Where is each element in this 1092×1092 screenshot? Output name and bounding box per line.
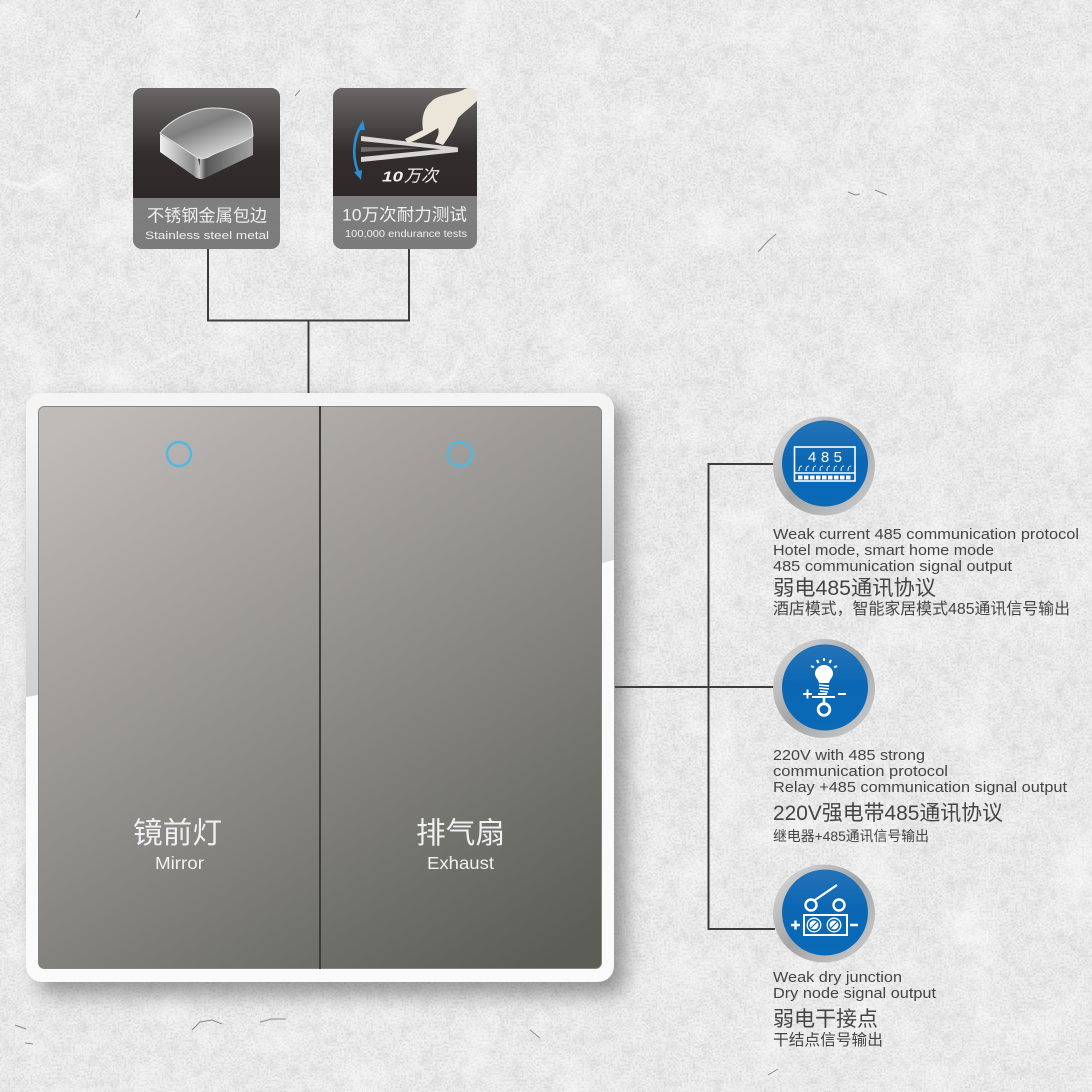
indicator: right button LED xyxy=(448,442,472,466)
label: mirror button: Mirror xyxy=(155,853,204,873)
text block: 485 protocol xyxy=(773,526,1079,618)
icon: finger pressing strips: 10 xyxy=(382,168,404,186)
text block: 220V strong current: 220V with 485 strong xyxy=(773,747,925,764)
text block: 220V strong current: 继电器+485通讯信号输出 xyxy=(773,828,929,844)
text block: 485 protocol: 485 communication signal output xyxy=(773,558,1013,575)
text block: 485 protocol: 弱电485通讯协议 xyxy=(773,577,936,600)
label: mirror button: 镜前灯 xyxy=(133,817,222,850)
icon: 220V strong current xyxy=(773,639,875,738)
icon: 485 protocol xyxy=(773,416,875,516)
text block: dry junction: Weak dry junction xyxy=(773,969,902,986)
text block: dry junction: 弱电干接点 xyxy=(773,1008,878,1031)
text block: dry junction: Dry node signal output xyxy=(773,985,937,1002)
label: exhaust button xyxy=(416,817,505,873)
text: stainless steel labels: Stainless steel metal xyxy=(145,230,269,242)
label: exhaust button: Exhaust xyxy=(427,853,494,873)
switch: glass panel xyxy=(38,406,602,969)
connector lines: top features xyxy=(208,248,409,394)
text block: 220V strong current xyxy=(773,747,1068,844)
icon: dry junction xyxy=(773,864,875,962)
icon: curved blue arrow xyxy=(354,120,365,180)
icon: finger pressing strips xyxy=(354,88,477,186)
text block: 220V strong current: Relay +485 communication signal output xyxy=(773,779,1068,796)
connector lines: right features xyxy=(615,464,775,929)
switch: outer frame xyxy=(26,393,614,982)
icon: finger pressing strips: 万次 xyxy=(404,166,440,186)
text block: 485 protocol: Hotel mode, smart home mode xyxy=(773,542,994,559)
text: stainless steel labels: 不锈钢金属包边 xyxy=(147,206,267,226)
text: endurance labels: 100,000 endurance tests xyxy=(345,229,467,240)
text block: dry junction: 干结点信号输出 xyxy=(773,1031,883,1049)
icon: metal edge block xyxy=(160,108,253,179)
text: endurance labels xyxy=(342,206,467,240)
text block: 485 protocol: Weak current 485 communication protocol xyxy=(773,526,1079,543)
text: endurance labels: 10万次耐力测试 xyxy=(342,206,467,224)
text block: 220V strong current: 220V强电带485通讯协议 xyxy=(773,802,1003,825)
switch shadow xyxy=(36,403,626,995)
icon: 485 protocol: 485 xyxy=(808,449,842,466)
text block: 485 protocol: 酒店模式，智能家居模式485通讯信号输出 xyxy=(773,600,1070,618)
label: mirror button xyxy=(133,817,222,873)
feature card: endurance test xyxy=(333,88,477,249)
indicator: left button LED xyxy=(167,442,191,466)
text block: 220V strong current: communication protocol xyxy=(773,763,948,780)
label: exhaust button: 排气扇 xyxy=(416,817,505,850)
text block: dry junction xyxy=(773,969,937,1049)
text: stainless steel labels xyxy=(145,206,269,242)
feature card: stainless steel xyxy=(133,88,280,249)
